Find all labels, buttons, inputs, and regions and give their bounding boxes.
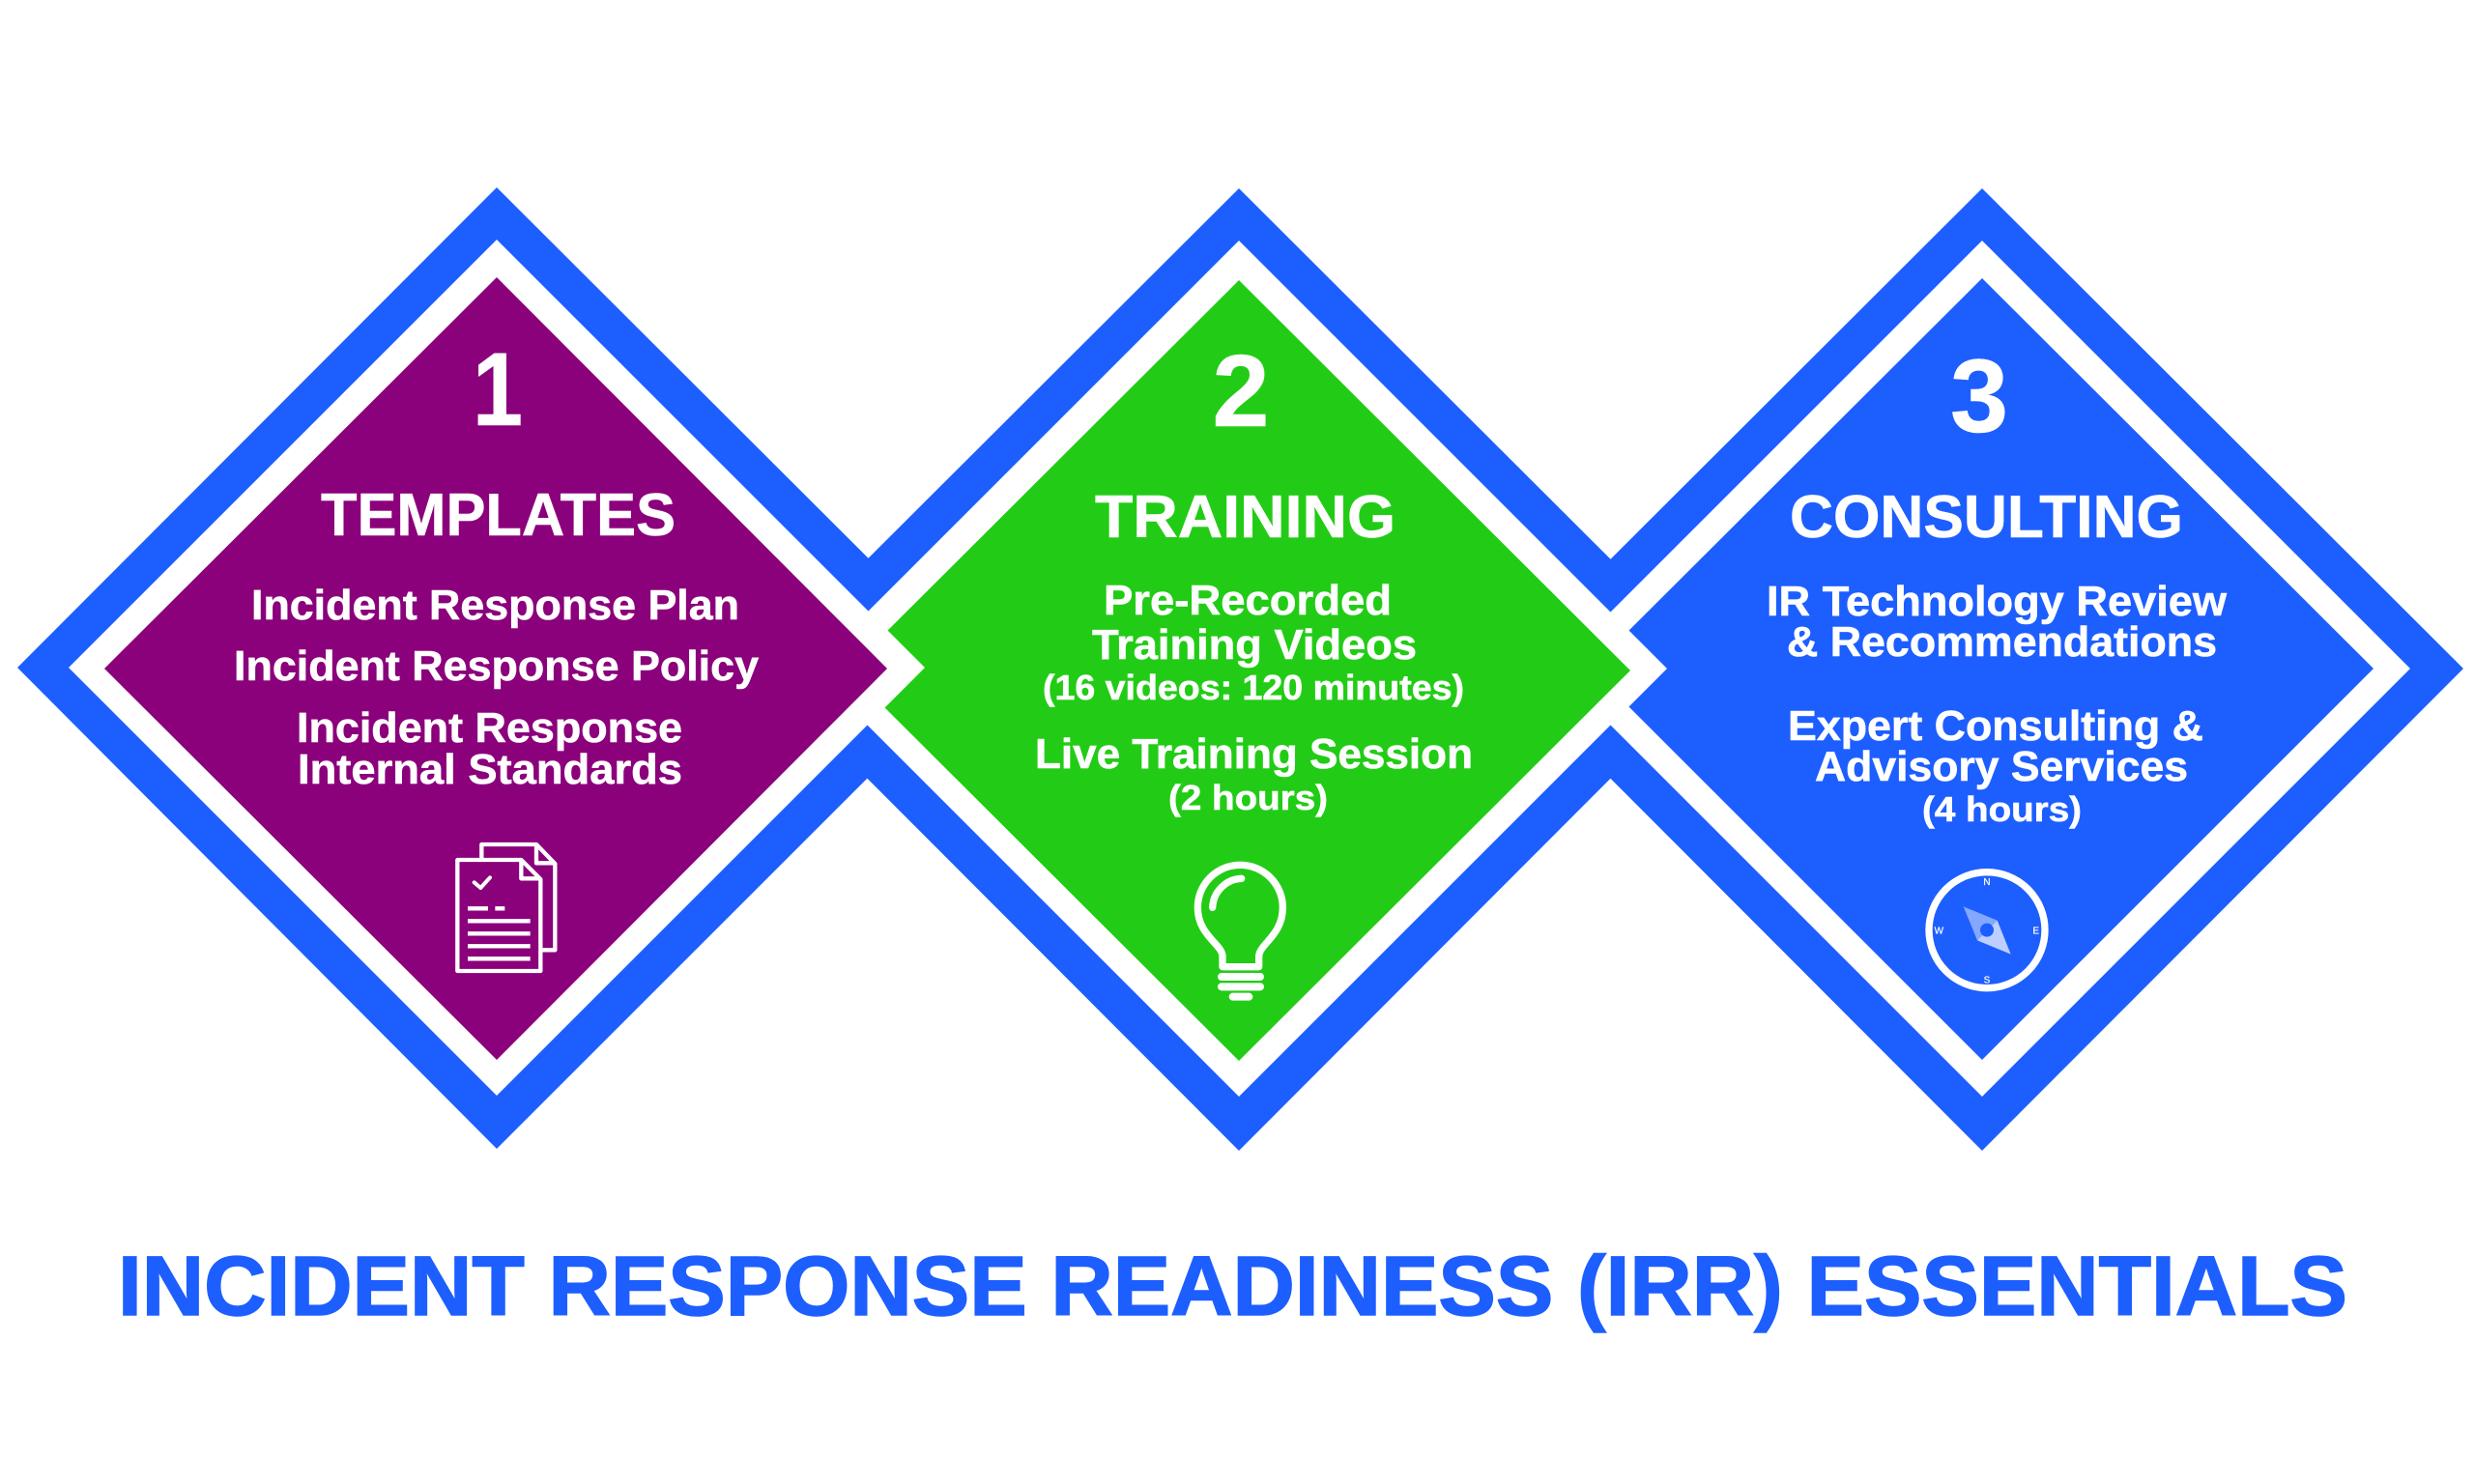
number 2: 2 <box>1213 334 1269 448</box>
icon: light bulb <box>1197 865 1282 997</box>
icon: compass <box>1929 872 2045 988</box>
icon: compass: S <box>1984 975 1991 985</box>
panel: consulting <box>1554 241 2410 1097</box>
icon: documents with checklist <box>457 844 555 971</box>
blue outline frame of three linked diamonds <box>17 187 2463 1151</box>
consulting item: advisory services: Advisory Services <box>1815 743 2188 790</box>
title: INCIDENT RESPONSE READINESS (IRR) ESSENTIALS <box>118 1240 2347 1333</box>
consulting item: technology review: IR Technology Review <box>1767 578 2228 625</box>
heading: training: TRAINING <box>1095 484 1395 551</box>
number 3: 3 <box>1950 337 2008 454</box>
training item: live session: (2 hours) <box>1168 778 1328 817</box>
training item: pre-recorded videos <box>1043 577 1464 707</box>
number 1: 1 <box>473 330 523 447</box>
icon: compass: N <box>1983 877 1991 888</box>
icon: compass: E <box>2032 926 2039 936</box>
training item: pre-recorded videos: (16 videos: 120 minutes) <box>1043 668 1464 707</box>
consulting item: advisory services <box>1788 702 2203 829</box>
consulting item: technology review: & Recommendations <box>1787 618 2217 666</box>
templates item: plan: Incident Response Plan <box>251 582 739 629</box>
consulting item: technology review <box>1767 578 2228 666</box>
heading: templates: TEMPLATES <box>321 482 676 549</box>
panel: training <box>811 241 1667 1097</box>
training item: pre-recorded videos: Pre-Recorded <box>1104 577 1392 624</box>
templates item: internal standards <box>297 704 682 793</box>
consulting item: advisory services: Expert Consulting & <box>1788 702 2203 750</box>
templates item: policy: Incident Response Policy <box>234 642 760 690</box>
icon: compass: W <box>1935 926 1944 936</box>
consulting item: advisory services: (4 hours) <box>1922 789 2082 829</box>
templates item: internal standards: Incident Response <box>297 704 682 752</box>
training item: pre-recorded videos: Training Videos <box>1092 621 1417 669</box>
training item: live session <box>1035 730 1473 817</box>
training item: live session: Live Training Session <box>1035 730 1473 778</box>
panel: templates <box>69 240 925 1096</box>
heading: consulting: CONSULTING <box>1790 484 2183 551</box>
templates item: internal standards: Internal Standards <box>298 746 682 793</box>
